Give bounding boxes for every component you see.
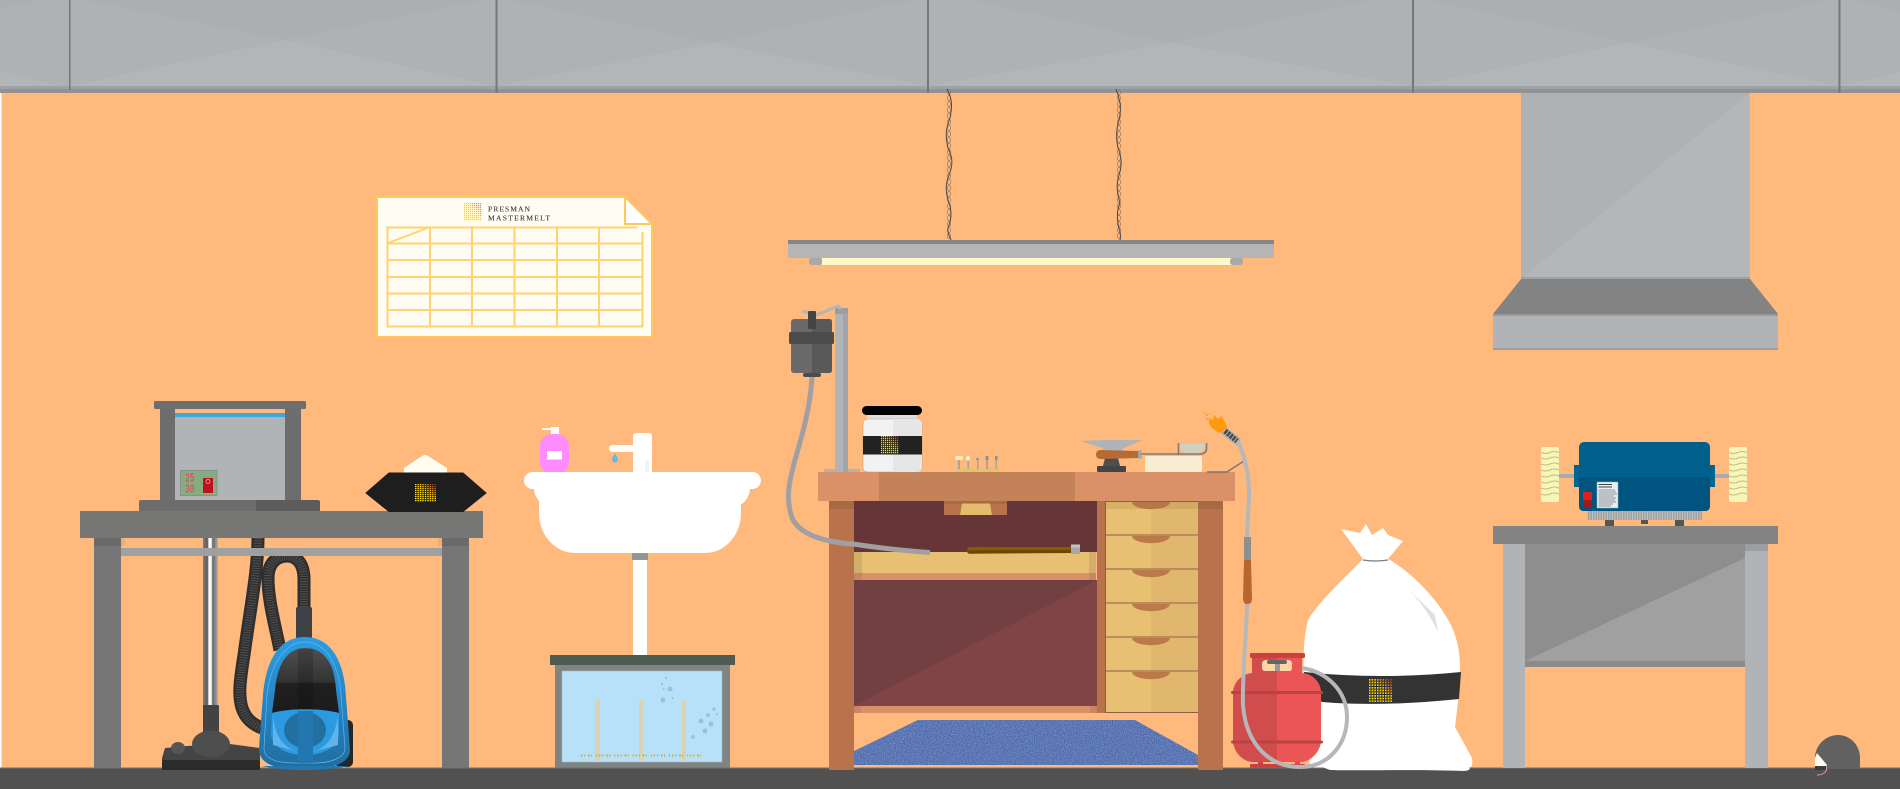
wall poster: Presman Mastermelt chart <box>377 197 652 337</box>
vacuum wheel <box>335 720 353 767</box>
sink basin <box>524 472 761 553</box>
workbench <box>818 472 1235 770</box>
poster brand name: PRESMAN <box>488 204 531 214</box>
tank bubbles <box>660 677 718 739</box>
water drop <box>612 452 618 462</box>
bench back panel upper <box>854 501 1097 552</box>
vacuum floor head <box>162 705 260 770</box>
table cross bar <box>121 548 442 556</box>
motor switch <box>1583 492 1592 507</box>
tray logo <box>415 485 437 501</box>
faucet <box>609 433 652 475</box>
bench grinder table <box>1493 526 1778 768</box>
handpiece on shelf <box>967 544 1080 554</box>
pendant drill <box>789 306 860 472</box>
fire brick <box>1145 456 1202 472</box>
motor feet <box>1605 518 1684 526</box>
floor rug <box>854 720 1198 765</box>
bag shading <box>1406 587 1438 632</box>
bench back panel lower <box>854 580 1097 706</box>
left table <box>80 511 483 768</box>
hanging light <box>788 89 1274 265</box>
ultrasonic cleaner <box>139 401 320 511</box>
wall poster: Presman Mastermelt chart: MASTERMELT <box>488 214 550 222</box>
bench shelf <box>854 552 1096 580</box>
mouse hole with mouse <box>1815 735 1860 775</box>
light tube <box>822 258 1232 265</box>
polishing wheels <box>1541 447 1747 502</box>
bench top <box>818 472 1235 501</box>
jar logo <box>881 437 899 453</box>
flexible drill shaft <box>788 377 930 552</box>
tank rods <box>595 700 686 762</box>
torch flame <box>1204 413 1227 433</box>
drill stand <box>802 306 860 472</box>
torch nozzle <box>1221 427 1241 446</box>
bag tie <box>1363 560 1388 561</box>
gold sediment <box>581 754 701 756</box>
vacuum base over floor edge <box>162 766 348 770</box>
bag of material <box>1303 524 1472 771</box>
small under-bench drawer <box>944 501 1007 515</box>
vacuum long hose <box>240 538 262 728</box>
torch grip <box>1244 537 1251 560</box>
light fixture <box>788 240 1274 244</box>
drill motor <box>789 311 834 377</box>
drawers <box>1106 502 1198 712</box>
bench legs over floor edge <box>829 766 1223 770</box>
control panel: 30 <box>185 484 195 496</box>
gas torch <box>1204 413 1347 767</box>
vacuum body <box>259 637 350 769</box>
anvil <box>1081 440 1142 472</box>
poster folded corner <box>625 197 652 224</box>
drain fitting <box>632 553 648 560</box>
motor shaft <box>1559 474 1729 478</box>
drain pipe <box>633 560 647 655</box>
bench divider post <box>1097 501 1105 713</box>
ultrasonic water tank <box>550 655 735 768</box>
vacuum cleaner <box>162 538 353 770</box>
poster logo <box>464 204 482 220</box>
poster table <box>387 227 643 327</box>
torch hose <box>1238 441 1347 767</box>
motor fins <box>1587 511 1702 520</box>
mouse tail <box>1817 765 1827 775</box>
rack of drill bits <box>955 456 999 472</box>
tank lid <box>550 655 735 665</box>
table top <box>80 511 483 538</box>
power button <box>203 478 213 493</box>
glass jar <box>862 406 922 472</box>
ceiling <box>0 0 1900 93</box>
vacuum looped hose <box>268 556 304 650</box>
gas cylinder <box>1231 653 1323 768</box>
table legs <box>94 538 121 768</box>
floor <box>0 768 1900 789</box>
torch wooden handle <box>1243 560 1252 604</box>
bench bottom rail <box>854 706 1097 713</box>
polishing motor <box>1541 442 1747 526</box>
sink fixture <box>524 427 761 655</box>
bag label band <box>1304 672 1461 704</box>
crucible holder with tongs <box>1096 443 1206 459</box>
timer readout: 25 <box>185 472 195 486</box>
soap dispenser <box>540 427 569 474</box>
torch rest <box>1207 461 1244 472</box>
motor housing <box>1574 442 1715 511</box>
bag base over floor edge <box>1322 767 1470 771</box>
motor data plate <box>1597 482 1618 508</box>
bench legs <box>829 501 1223 770</box>
left wall edge <box>0 93 2 768</box>
bag logo <box>1369 680 1393 701</box>
suspension wires <box>946 89 1121 242</box>
ceiling panel pattern <box>0 0 1900 86</box>
mouse <box>1815 753 1827 775</box>
vacuum tube <box>203 538 218 707</box>
extractor hood <box>1493 93 1778 350</box>
black tray with powder <box>366 455 486 512</box>
control panel <box>180 470 217 496</box>
vacuum neck <box>296 607 312 639</box>
